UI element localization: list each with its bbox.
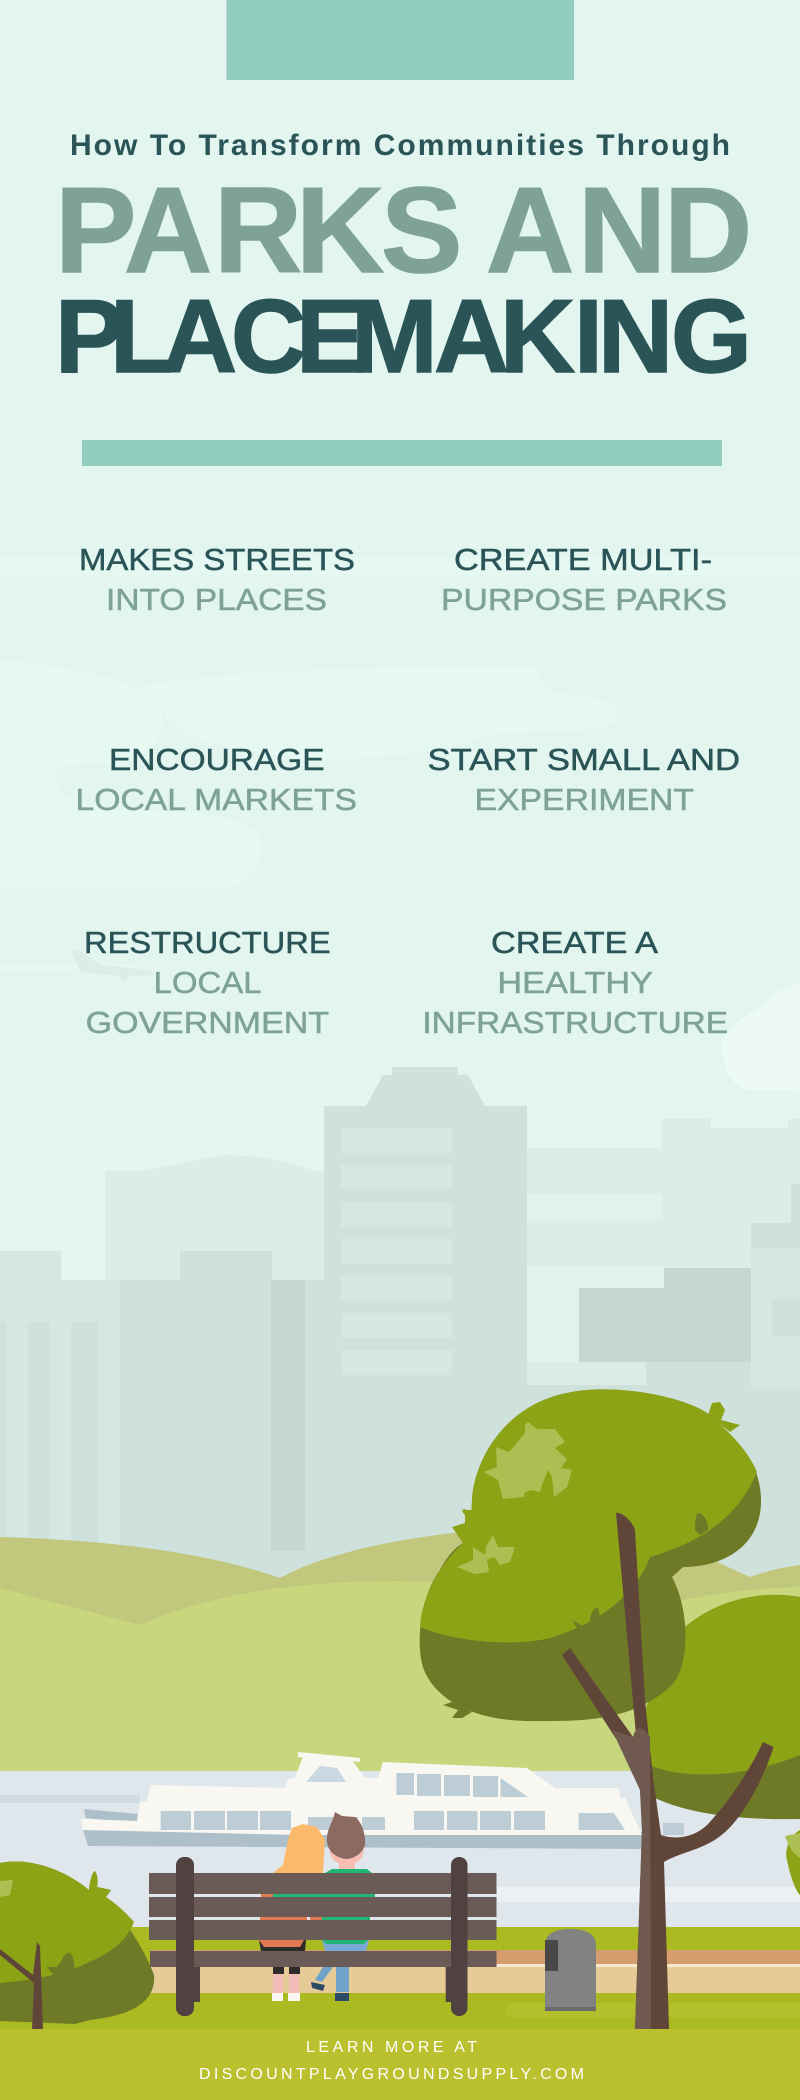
title: PARKS AND: PARKS AND [55,162,752,298]
footer text: LEARN MORE AT [306,2039,477,2056]
ground: grass and path [0,1927,800,2029]
trash can [545,1929,596,2011]
front hill [0,1581,800,1780]
airplane silhouette [72,950,155,981]
right cloud [722,984,800,1091]
item: Create A Healthy Infrastructure: HEALTHY [497,965,653,1000]
city skyline [0,1067,800,1625]
item: Restructure Local Government: LOCAL [154,965,262,1000]
river [0,1771,800,1927]
footer text [199,2039,584,2083]
item: Encourage Local Markets: ENCOURAGE [109,742,324,777]
small bush [0,1862,154,2024]
divider bar [82,440,722,466]
footer band [0,2029,800,2100]
top accent bar [226,0,574,80]
subtitle: How To Transform Communities Through [70,129,730,162]
item: Create Multi-Purpose Parks: PURPOSE PARKS [441,582,727,617]
boat [81,1752,684,1849]
item: Start Small And Experiment: START SMALL AND [428,742,740,777]
item: Makes Streets Into Places: MAKES STREETS [79,542,355,577]
item: Restructure Local Government: RESTRUCTURE [84,925,331,960]
item: Create Multi-Purpose Parks: CREATE MULTI- [454,542,712,577]
park bench [149,1857,496,2016]
item: Restructure Local Government: GOVERNMENT [86,1005,329,1040]
big tree trunk and branches [562,1513,774,2029]
item: Create A Healthy Infrastructure: INFRASTRUCTURE [422,1005,728,1040]
item: Create A Healthy Infrastructure: CREATE A [491,925,658,960]
right tree foliage [640,1595,800,1895]
footer text: DISCOUNTPLAYGROUNDSUPPLY.COM [199,2066,584,2083]
sky clouds [0,557,800,971]
item: Makes Streets Into Places [79,542,355,617]
small tree trunk [0,1942,43,2029]
item: Start Small And Experiment: EXPERIMENT [474,782,694,817]
item: Restructure Local Government [84,925,331,1040]
item: Encourage Local Markets [76,742,357,817]
couple seen from behind [259,1812,375,2001]
back hills [0,1526,800,1650]
item: Makes Streets Into Places: INTO PLACES [106,582,327,617]
big tree foliage [420,1389,761,1721]
item: Create Multi-Purpose Parks [441,542,727,617]
item: Encourage Local Markets: LOCAL MARKETS [76,782,357,817]
item: Start Small And Experiment [428,742,740,817]
title: PLACEMAKING: PLACEMAKING [55,279,752,395]
item: Create A Healthy Infrastructure [422,925,728,1040]
